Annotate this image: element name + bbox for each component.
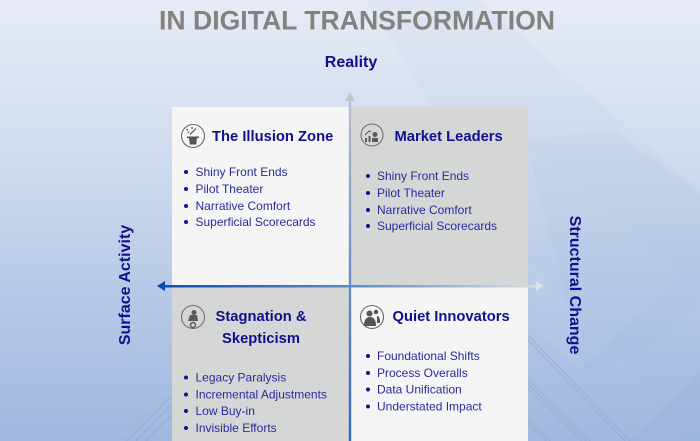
list: Data Unification: [377, 382, 462, 396]
list: Incremental Adjustments: [196, 388, 327, 402]
panel: Market Leaders: [351, 107, 528, 285]
heading: Quiet Innovators: [392, 309, 510, 325]
list: Narrative Comfort: [196, 199, 291, 213]
heading: Market Leaders: [394, 129, 503, 145]
list: Superficial Scorecards: [377, 219, 497, 233]
panel: Quiet Innovators: [351, 287, 528, 441]
list: [366, 169, 497, 233]
list: Legacy Paralysis: [196, 370, 286, 384]
heading: The Illusion Zone: [212, 129, 333, 145]
list: Foundational Shifts: [377, 349, 480, 363]
list: [184, 165, 316, 229]
title: IN DIGITAL TRANSFORMATION: [159, 6, 555, 36]
list: Invisible Efforts: [196, 421, 277, 435]
arrow: vertical axis: [345, 92, 355, 441]
list: Process Overalls: [377, 366, 468, 380]
list: Pilot Theater: [377, 186, 445, 200]
axis label: Structural Change: Structural Change: [566, 216, 583, 354]
icon: two people: [360, 306, 384, 328]
heading: Skepticism: [222, 331, 300, 347]
list: Shiny Front Ends: [377, 169, 469, 183]
icon: chart and people: [361, 124, 383, 146]
panel: The Illusion Zone: [172, 107, 349, 285]
arrow: horizontal axis: [157, 281, 543, 291]
list: Understated Impact: [377, 400, 482, 414]
list: Shiny Front Ends: [196, 165, 288, 179]
list: Low Buy-in: [196, 404, 255, 418]
icon: magic hat: [182, 124, 204, 148]
heading: Stagnation &: [216, 309, 307, 325]
list: Narrative Comfort: [377, 203, 472, 217]
icon: person and gear: [182, 306, 204, 328]
list: Pilot Theater: [196, 182, 263, 196]
axis label: Surface Activity: Surface Activity: [117, 225, 134, 345]
list: Superficial Scorecards: [196, 215, 316, 229]
list: [184, 370, 327, 435]
axis label: Reality: Reality: [325, 54, 377, 71]
heading: [216, 309, 307, 347]
panel: Stagnation & Skepticism: [172, 287, 349, 441]
list: [366, 349, 482, 414]
